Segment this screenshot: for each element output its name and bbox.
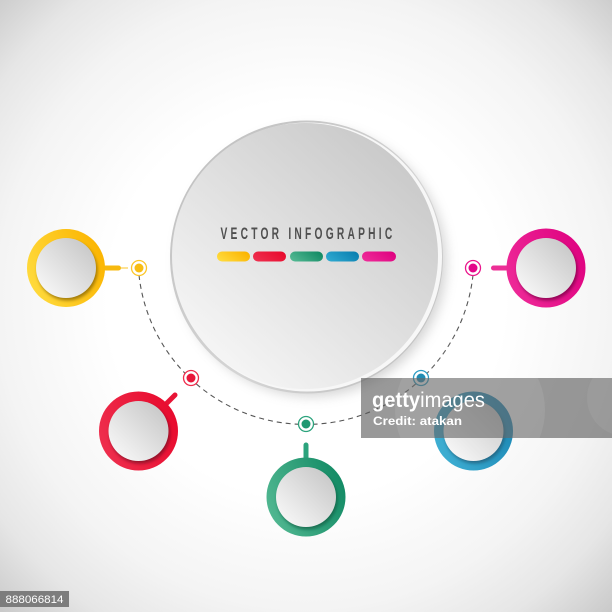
watermark banner: gettyimages [372, 389, 485, 412]
step: blue [414, 370, 513, 470]
step: red [99, 370, 198, 470]
image id tag [0, 591, 69, 607]
heading: VECTOR INFOGRAPHIC [220, 225, 392, 243]
colour bars [217, 252, 396, 262]
step: green [266, 416, 346, 536]
image id tag: 888066814 [6, 594, 63, 606]
step: magenta [466, 228, 586, 308]
watermark banner [361, 335, 612, 485]
step: yellow [27, 229, 146, 307]
dashed arc connector [139, 275, 473, 424]
panel: central disc [170, 120, 446, 396]
watermark banner: Credit: atakan [373, 414, 462, 428]
